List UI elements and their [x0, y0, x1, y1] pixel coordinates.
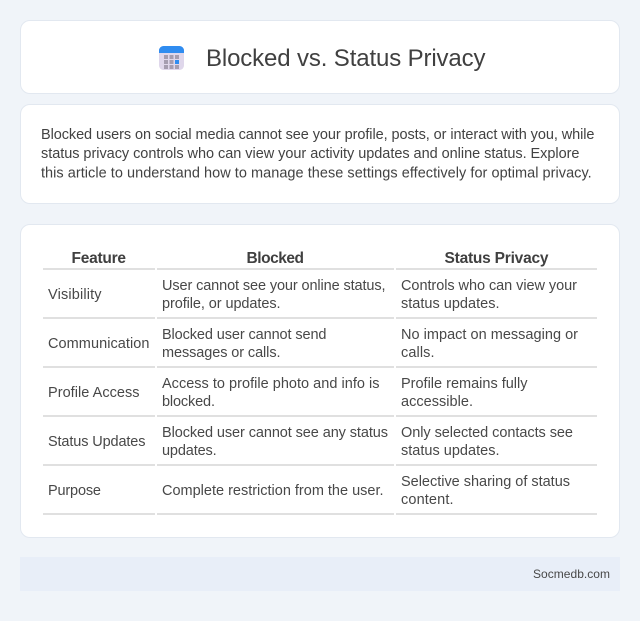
row: visibility: status updates.	[401, 296, 500, 312]
row: status updates: Status Updates	[48, 434, 146, 450]
row: status updates: Blocked user cannot see any status	[162, 425, 388, 441]
row: visibility: Controls who can view your	[401, 278, 577, 294]
row: communication: calls.	[401, 345, 434, 361]
row: visibility	[48, 278, 577, 312]
row: visibility: Visibility	[48, 287, 102, 303]
row: profile access: Profile Access	[48, 385, 140, 401]
panel: title card	[20, 20, 620, 94]
row: visibility: profile, or updates.	[162, 296, 280, 312]
table headers: Status Privacy	[444, 250, 549, 267]
table headers: Blocked	[246, 250, 304, 267]
row: profile access	[48, 376, 528, 410]
row: status updates: status updates.	[401, 443, 500, 459]
row: communication: Blocked user cannot send	[162, 327, 326, 343]
row: purpose: Complete restriction from the user.	[162, 483, 384, 499]
row: status updates: updates.	[162, 443, 217, 459]
row: purpose: content.	[401, 492, 454, 508]
footer text: Socmedb.com	[533, 567, 610, 581]
intro text: this article to understand how to manage these settings effectively for optimal privacy.	[41, 166, 592, 182]
footer bar	[20, 557, 620, 591]
row: communication: messages or calls.	[162, 345, 280, 361]
row: status updates: Only selected contacts see	[401, 425, 573, 441]
table headers	[72, 250, 549, 267]
icon: calendar	[159, 46, 184, 70]
row: purpose: Purpose	[48, 483, 101, 499]
row: communication: Communication	[48, 336, 150, 352]
intro text: status privacy controls who can view your activity updates and online status. Explore	[41, 146, 580, 162]
intro text	[41, 127, 594, 182]
table headers: Feature	[72, 250, 126, 267]
row: purpose: Selective sharing of status	[401, 474, 570, 490]
panel: intro card	[20, 104, 620, 204]
title: Blocked vs. Status Privacy	[206, 45, 486, 72]
panel: comparison table card	[20, 224, 620, 538]
row: communication: No impact on messaging or	[401, 327, 578, 343]
row: visibility: User cannot see your online status,	[162, 278, 386, 294]
row: profile access: Access to profile photo and info is	[162, 376, 380, 392]
row: purpose	[48, 474, 570, 508]
intro text: Blocked users on social media cannot see your profile, posts, or interact with you, while	[41, 127, 594, 143]
row: profile access: Profile remains fully	[401, 376, 528, 392]
row: profile access: accessible.	[401, 394, 473, 410]
row: communication	[48, 327, 578, 361]
row: profile access: blocked.	[162, 394, 215, 410]
row: status updates	[48, 425, 573, 459]
